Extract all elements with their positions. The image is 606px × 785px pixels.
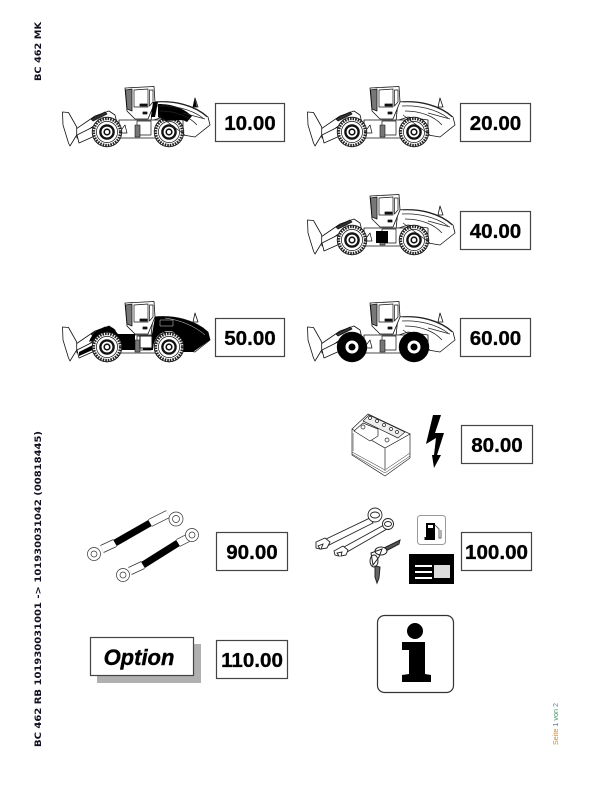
number box 100.00: [462, 532, 532, 570]
loader illustration 50: [62, 302, 210, 362]
number box 80.00: [462, 426, 532, 464]
number box 110.00: 110.00: [221, 649, 283, 672]
icon: fuel pump: [418, 516, 446, 544]
upper hose: [88, 512, 183, 560]
loader illustration 20: [308, 86, 455, 147]
option badge: Option: [104, 645, 174, 670]
number box 110.00: [216, 640, 288, 678]
number box 90.00: [216, 532, 288, 570]
icon: lightning bolt: [426, 415, 444, 468]
group 50.00: loader with body highlighted: [62, 302, 284, 362]
number box 20.00: [460, 104, 530, 142]
number box 40.00: [460, 212, 530, 250]
page number: Seite 1 von 2: [553, 703, 560, 745]
side label: model code: BC 462 MK: [34, 21, 44, 81]
number box 100.00: 100.00: [465, 541, 528, 564]
icon: data plate: [409, 554, 454, 584]
group 60.00: loader with tyres highlighted: [308, 302, 530, 362]
number box 20.00: 20.00: [470, 112, 521, 135]
group 40.00: loader with articulation highlighted: [308, 194, 530, 255]
number box 50.00: 50.00: [224, 327, 276, 350]
number box 60.00: 60.00: [470, 327, 521, 350]
number box 10.00: [216, 104, 284, 142]
option badge: [90, 638, 201, 683]
group 10.00: loader with engine highlighted: [62, 86, 284, 147]
loader illustration 40: [308, 194, 455, 255]
number box 50.00: [216, 318, 284, 356]
number box 40.00: 40.00: [470, 220, 521, 243]
number box 80.00: 80.00: [471, 434, 523, 457]
icon: information sign: [378, 616, 454, 692]
number box 90.00: 90.00: [226, 541, 278, 564]
number box 60.00: [460, 318, 530, 356]
loader illustration 60: [308, 302, 455, 362]
group 20.00: loader with hood: [308, 86, 530, 147]
icon: hydraulic hoses: [88, 512, 198, 582]
icon: keys: [370, 540, 400, 583]
icon: wrenches: [316, 508, 394, 556]
side label: serial range: BC 462 RB 101930031001 -> 101930031042 (00818445): [34, 431, 44, 747]
loader illustration 10: [62, 86, 210, 147]
lower hose: [116, 528, 198, 582]
number box 10.00: 10.00: [224, 112, 276, 135]
icon: battery: [352, 414, 410, 476]
